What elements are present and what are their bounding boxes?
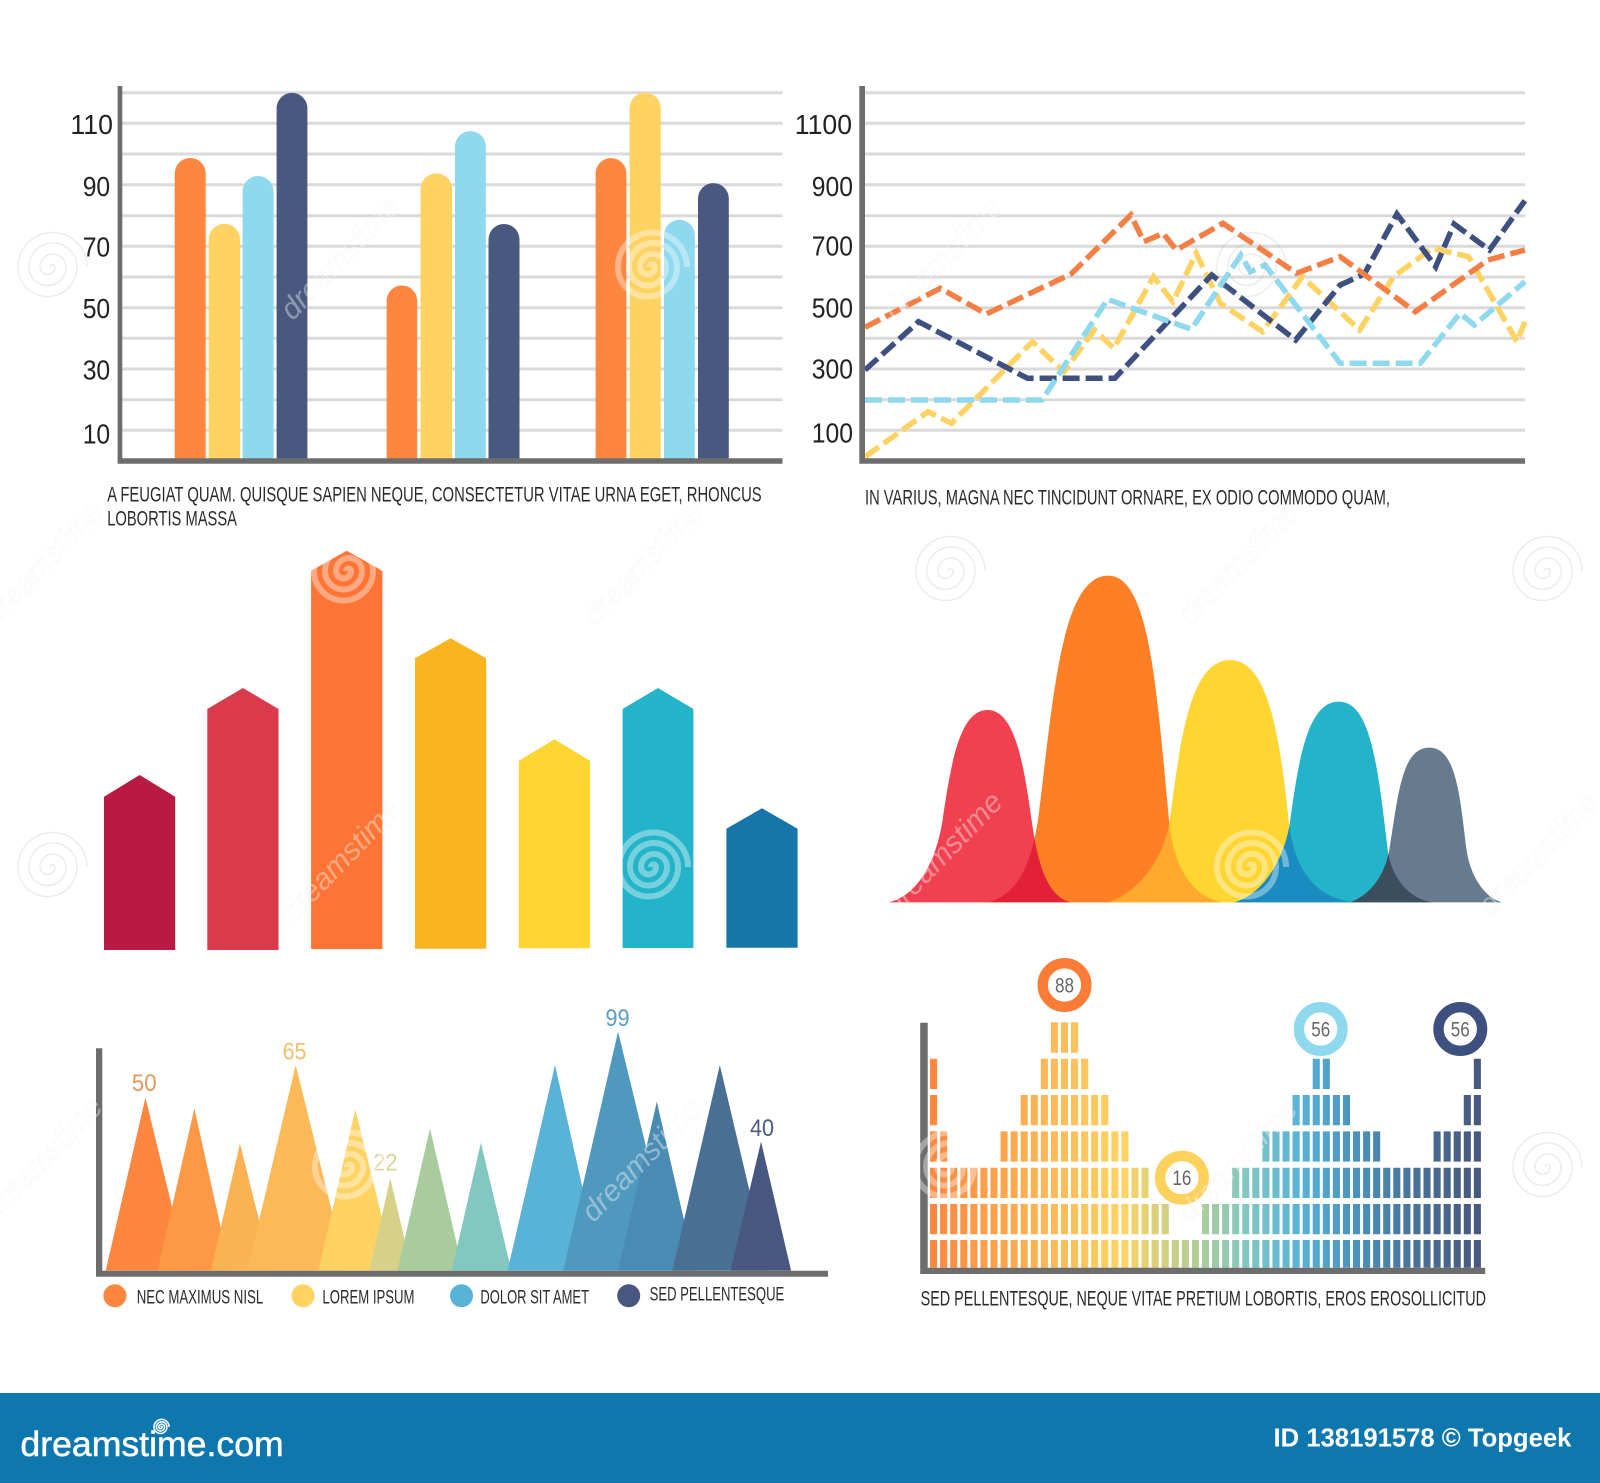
value labels: 65 — [283, 1038, 306, 1065]
caption: bar chart: A FEUGIAT QUAM. QUISQUE SAPIEN NEQUE, CONSECTETUR VITAE URNA EGET, RHONCUS — [107, 484, 762, 506]
bars: third group — [596, 93, 729, 459]
triangles — [106, 1032, 791, 1271]
panel: triangle peak chart — [96, 1005, 828, 1277]
panel: rounded bar chart — [70, 86, 782, 464]
marker: 56 light blue: 56 — [1311, 1018, 1330, 1042]
columns — [930, 1038, 1481, 1254]
value labels — [132, 1005, 774, 1177]
line: orange series — [865, 215, 1525, 327]
y-axis labels: 500 — [812, 293, 853, 324]
y-axis labels — [70, 109, 113, 449]
footer logo: dreamstime.com — [20, 1425, 284, 1464]
y-axis labels: 110 — [70, 109, 113, 140]
footer bar — [0, 1393, 1600, 1483]
caption: bar chart: LOBORTIS MASSA — [107, 508, 237, 530]
watermark overlay: dreamstime — [877, 191, 1009, 326]
watermark overlay: dreamstime — [275, 793, 407, 928]
watermark overlay: dreamstime — [577, 496, 709, 631]
legend: NEC MAXIMUS NISL — [137, 1287, 263, 1308]
line: light blue series — [865, 255, 1525, 400]
marker: 56 navy: 56 — [1451, 1018, 1470, 1042]
line: yellow series — [865, 248, 1525, 457]
watermark overlay: dreamstime — [274, 191, 406, 326]
marker: 56 light blue — [1299, 1007, 1342, 1051]
watermark overlay: dreamstime — [1172, 1093, 1304, 1228]
panel: dashed line chart — [795, 86, 1525, 464]
value labels: 40 — [750, 1115, 774, 1142]
y-axis labels: 100 — [812, 418, 853, 449]
bars: first group — [175, 93, 307, 459]
y-axis labels — [795, 109, 853, 449]
bars: second group — [387, 131, 520, 459]
y-axis labels: 900 — [812, 171, 853, 202]
marker: 16: 16 — [1172, 1167, 1191, 1190]
value labels: 22 — [373, 1150, 398, 1177]
footer image id: ID 138191578 © Topgeek — [1274, 1423, 1572, 1453]
y-axis labels: 1100 — [795, 109, 852, 140]
value labels: 50 — [132, 1070, 157, 1097]
legend: DOLOR SIT AMET — [480, 1287, 589, 1308]
legend: LOREM IPSUM — [322, 1287, 414, 1308]
marker: 56 navy — [1438, 1007, 1482, 1051]
line: navy series — [865, 201, 1525, 378]
value labels: 99 — [605, 1005, 630, 1032]
watermark overlay: dreamstime — [877, 786, 1009, 921]
y-axis labels: 70 — [83, 232, 110, 263]
marker: 16 — [1160, 1156, 1204, 1199]
y-axis labels: 90 — [83, 171, 110, 202]
legend: SED PELLENTESQUE — [650, 1285, 784, 1306]
y-axis labels: 30 — [83, 354, 110, 385]
panel: overlapping bell curves — [889, 576, 1502, 902]
watermark overlay — [0, 191, 1600, 1228]
y-axis labels: 50 — [83, 293, 110, 324]
marker: 88 — [1043, 963, 1086, 1007]
panel: segmented column chart — [920, 963, 1485, 1274]
y-axis labels: 300 — [812, 353, 853, 384]
watermark overlay: dreamstime — [575, 1093, 707, 1228]
y-axis labels: 700 — [812, 231, 853, 262]
y-axis labels: 10 — [83, 418, 110, 449]
caption: bar chart — [107, 484, 762, 530]
marker: 88: 88 — [1055, 974, 1074, 998]
legend — [103, 1284, 784, 1308]
caption: line chart: IN VARIUS, MAGNA NEC TINCIDUNT ORNARE, EX ODIO COMMODO QUAM, — [865, 486, 1390, 509]
panel: arrow-top bar chart — [104, 551, 798, 950]
watermark overlay: dreamstime — [1172, 496, 1304, 631]
